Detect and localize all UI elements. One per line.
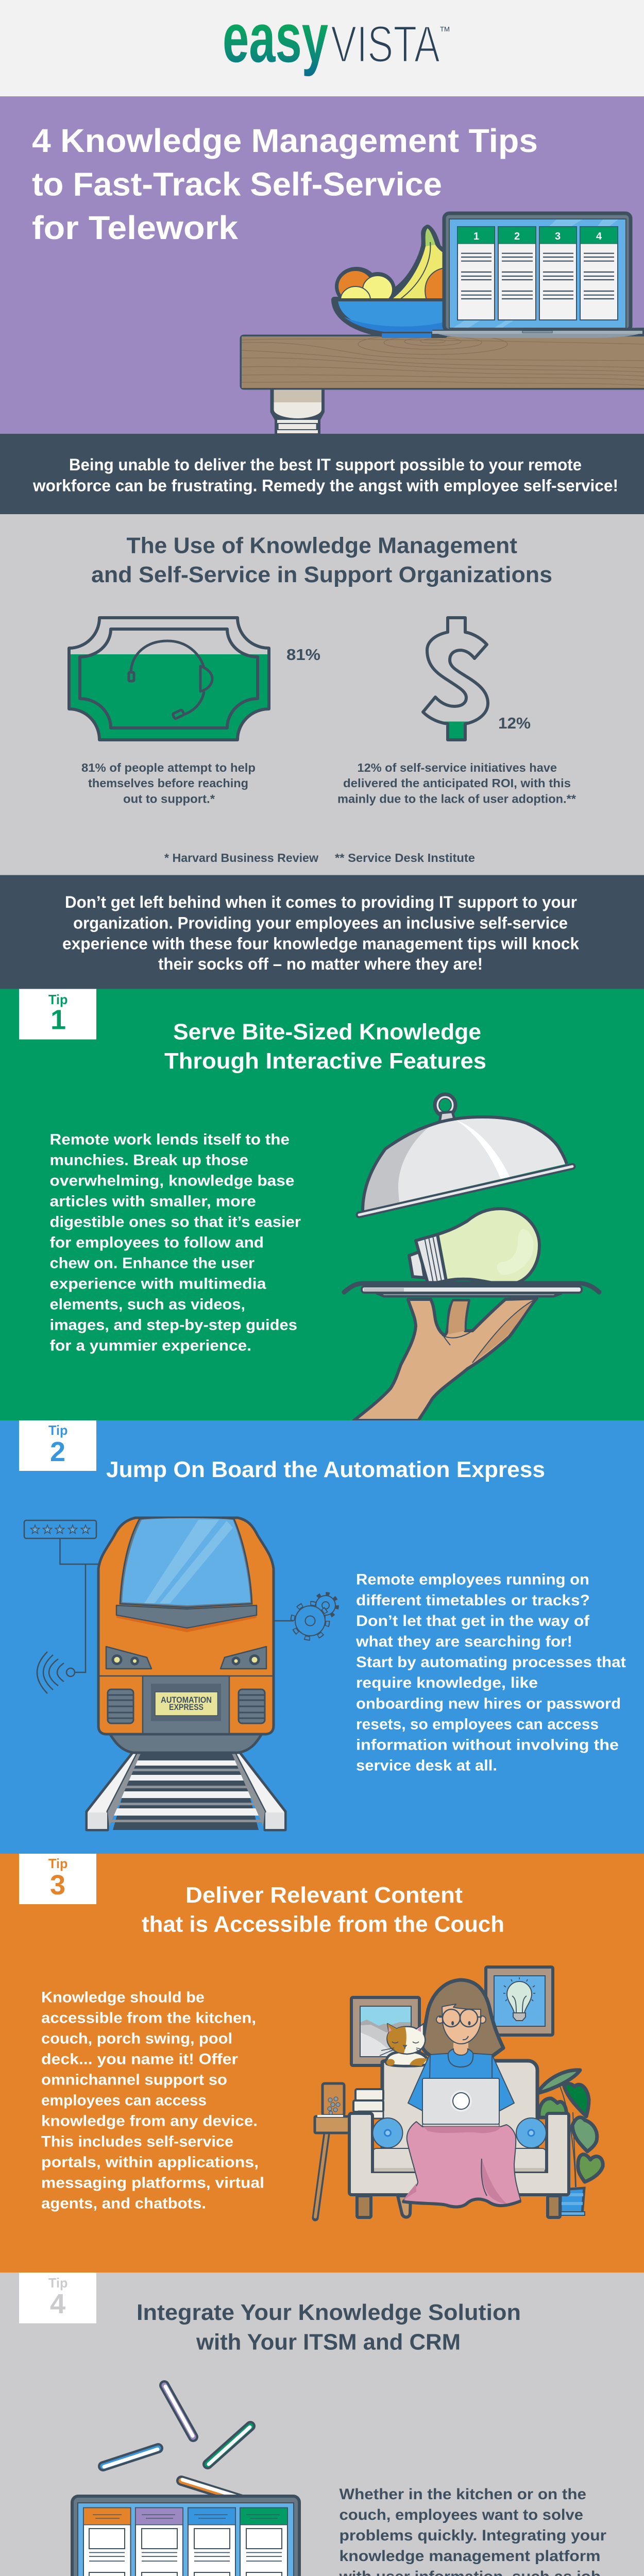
text: tip 3 body: portals, within applications, [41,2154,259,2171]
couch laptop [422,2078,499,2127]
article columns [457,227,618,320]
panel: header with logo [0,0,644,96]
text: tip 3 body: Knowledge should be [41,1989,205,2006]
text: tip 2 body: require knowledge, like [356,1674,538,1691]
sign: automation express: EXPRESS [169,1702,204,1712]
tip badge 4: 4 [50,2289,65,2319]
panel: lead-in banner: experience with these four knowledge management tips will knock [62,935,579,953]
framed picture: light bulb [486,1967,553,2035]
text: tip 2 body: service desk at all. [356,1757,497,1774]
heading: statistics: and Self-Service in Support Organizations [91,562,552,587]
tip badge 1 [19,989,96,1040]
text: tip 3 body: agents, and chatbots. [41,2195,206,2212]
text: tip 3 body: omnichannel support so [41,2071,227,2088]
glasses [439,2009,482,2027]
tray [344,1283,599,1296]
panel: hero [0,96,644,434]
panel: tip 1 [0,989,644,1420]
text: tip 3 body: messaging platforms, virtual [41,2174,264,2191]
connector lines and wireless icon [37,1538,98,1693]
heading: tip 2: Jump On Board the Automation Express [106,1457,545,1482]
text: tip 3 body: couch, porch swing, pool [41,2030,232,2047]
plant [537,2070,603,2187]
heading: tip 4: Integrate Your Knowledge Solution [137,2300,521,2325]
heading: tip 4 [137,2300,521,2355]
visor [116,1605,257,1628]
article columns: 3 [555,231,561,242]
side table [315,2083,349,2218]
text: tip 1 body: for employees to follow and [49,1234,264,1251]
text: tip 1 body: experience with multimedia [49,1276,266,1292]
train body [98,1517,274,1753]
text: tip 1 body: elements, such as videos, [49,1296,245,1313]
flying cards [103,2385,250,2500]
text: tip 4 body [338,2486,606,2576]
flower pot [559,2188,585,2215]
panel: statistics [0,514,644,875]
neck [453,2043,468,2060]
desk top [240,334,644,389]
tip badge 2: 2 [50,1436,65,1467]
column 4 [240,2508,287,2576]
screen columns [83,2508,287,2576]
panel: intro banner: Being unable to deliver the best IT support possible to your remote [69,455,582,474]
text: tip 1 body: chew on. Enhance the user [49,1255,255,1272]
text: tip 2 body: what they are searching for! [355,1633,572,1650]
illustration: woman on armchair with laptop and cat [315,1967,603,2218]
logo: easyVISTA: VISTA [331,15,440,73]
icon: banknote with headset, 81% filled [67,618,273,742]
pillows [373,2118,546,2148]
face [436,2004,486,2044]
tip badge 2: Tip [48,1422,68,1438]
panel: lead-in banner: organization. Providing your employees an inclusive self-service [73,914,568,933]
heading: tip 3: Deliver Relevant Content [185,1883,463,1908]
text: tip 1 body: for a yummier experience. [49,1337,251,1354]
text: tip 4 body: problems quickly. Integrating your [339,2527,606,2544]
caption: 81% [81,761,256,806]
sign: automation express [155,1692,217,1716]
illustration: monitor with cards flying in [72,2385,299,2576]
logo: easyVISTA: TM [440,25,450,33]
railway track [87,1752,285,1830]
tip badge 3 [19,1854,96,1904]
logo: easyVISTA: easy [223,0,328,77]
fruit outline halo [334,228,445,335]
column 1 [83,2508,131,2576]
heading: statistics [91,533,552,587]
column 3 [188,2508,235,2576]
panel: tip 2 [0,1420,644,1854]
text: tip 2 body [355,1571,626,1774]
text: tip 2 body: information without involving the [356,1736,619,1754]
caption: 12%: mainly due to the lack of user adoption.** [337,792,576,806]
text: tip 1 body [49,1131,301,1354]
column 2 [135,2508,183,2576]
heading: tip 1 [164,1020,486,1074]
hand [354,1298,537,1420]
tip badge 4: Tip [48,2275,68,2291]
tip badge 1: Tip [48,992,68,1007]
sources: ** Service Desk Institute [335,851,475,865]
panel: lead-in banner: Don’t get left behind when it comes to providing IT support to your [65,893,577,911]
text: tip 2 body: Don’t let that get in the way of [356,1613,590,1630]
caption: 12% [337,761,576,806]
sources [164,851,475,865]
chair seat cushion [372,2148,546,2172]
article columns: 1 [473,231,479,242]
collar [448,2049,473,2067]
tip badge 3: 3 [50,1870,65,1901]
text: tip 3 body: knowledge from any device. [41,2112,258,2129]
card: blue [103,2448,158,2467]
article columns: 2 [514,231,520,242]
fruit bowl [334,228,445,338]
caption: 81%: themselves before reaching [88,776,248,790]
headlights [106,1647,266,1669]
headset [129,641,212,719]
caption: 12%: delivered the anticipated ROI, with this [343,776,571,790]
vents [108,1689,265,1723]
text: tip 1 body: digestible ones so that it’s easier [49,1214,301,1230]
text: tip 1 body: munchies. Break up those [49,1152,248,1168]
icon: password field [24,1520,96,1538]
framed picture: mountains [351,1997,419,2065]
text: tip 4 body: Whether in the kitchen or on the [339,2486,586,2503]
card: purple [164,2385,193,2437]
tip badge 2 [19,1420,96,1471]
sources: * Harvard Business Review [164,851,318,865]
stack of books [353,2089,383,2119]
text: tip 1 body: images, and step-by-step guides [49,1317,297,1333]
article columns: 4 [596,231,602,242]
panel: lead-in banner: their socks off – no matter where they are! [158,955,483,973]
light bulb [409,1209,539,1284]
text: tip 3 body: accessible from the kitchen, [41,2009,256,2026]
armchair back [382,2061,537,2154]
heading: tip 3: that is Accessible from the Couch [142,1912,504,1937]
heading: statistics: The Use of Knowledge Management [127,533,517,558]
title: 4 Knowledge Management Tips [32,122,538,159]
text: tip 1 body: articles with smaller, more [49,1193,256,1210]
windshield [120,1517,252,1607]
card: green [208,2426,250,2464]
desk leg [270,386,325,434]
panel: tip 3 [0,1854,644,2273]
illustration: desk with fruit bowl and laptop [240,213,644,434]
icon: gears [274,1594,337,1638]
cat [380,2024,429,2066]
text: tip 4 body: couch, employees want to solve [339,2506,583,2523]
heading: tip 1: Through Interactive Features [164,1048,486,1074]
logo: easyVISTA [223,0,450,77]
panel: intro banner: workforce can be frustrating. Remedy the angst with employee self-service! [32,476,618,495]
cloche [359,1094,572,1216]
title: to Fast-Track Self-Service [32,166,442,203]
hair back [422,1980,503,2057]
tip badge 3: Tip [48,1856,68,1871]
text: tip 2 body: Remote employees running on [356,1571,589,1588]
laptop [432,213,644,338]
title: for Telework [32,209,238,246]
label: 81%: 81% [286,646,320,664]
panel: intro banner [0,434,644,514]
label: 12%: 12% [498,714,531,732]
sweater [408,2053,514,2111]
tip badge 1: 1 [50,1005,66,1036]
chair legs [357,2196,560,2217]
chair arms and base [349,2113,569,2195]
text: tip 4 body: knowledge management platform [339,2548,601,2565]
text: tip 2 body: resets, so employees can access [356,1716,599,1733]
panel: lead-in banner [0,875,644,989]
illustration: hand lifting cloche from light bulb [344,1094,599,1420]
blanket [402,2122,521,2207]
heading: tip 4: with Your ITSM and CRM [196,2330,461,2355]
text: tip 2 body: Start by automating processes that [356,1654,626,1671]
text: tip 2 body: onboarding new hires or password [356,1695,621,1712]
caption: 12%: 12% of self-service initiatives have [358,761,557,774]
text: tip 1 body: overwhelming, knowledge base [49,1173,295,1189]
monitor frame [72,2496,299,2576]
heading: tip 1: Serve Bite-Sized Knowledge [173,1020,481,1045]
title [32,122,538,246]
caption: 81%: out to support.* [123,792,215,806]
text: tip 2 body: different timetables or tracks? [356,1592,590,1609]
caption: 81%: 81% of people attempt to help [81,761,256,774]
text: tip 3 body: deck... you name it! Offer [41,2050,238,2067]
text: tip 3 body: employees can access [41,2092,207,2109]
text: tip 3 body: This includes self-service [41,2133,233,2150]
text: tip 1 body: Remote work lends itself to the [49,1131,290,1148]
panel: tip 4 [0,2273,644,2576]
heading: tip 3 [142,1883,504,1937]
tip badge 4 [19,2273,96,2324]
card: orange [181,2480,242,2500]
icon: dollar sign, 12% filled [421,616,489,741]
text: tip 3 body [41,1989,264,2212]
sign: automation express: AUTOMATION [161,1695,212,1705]
front panel [143,1676,229,1734]
illustration: automation express train [24,1517,337,1830]
